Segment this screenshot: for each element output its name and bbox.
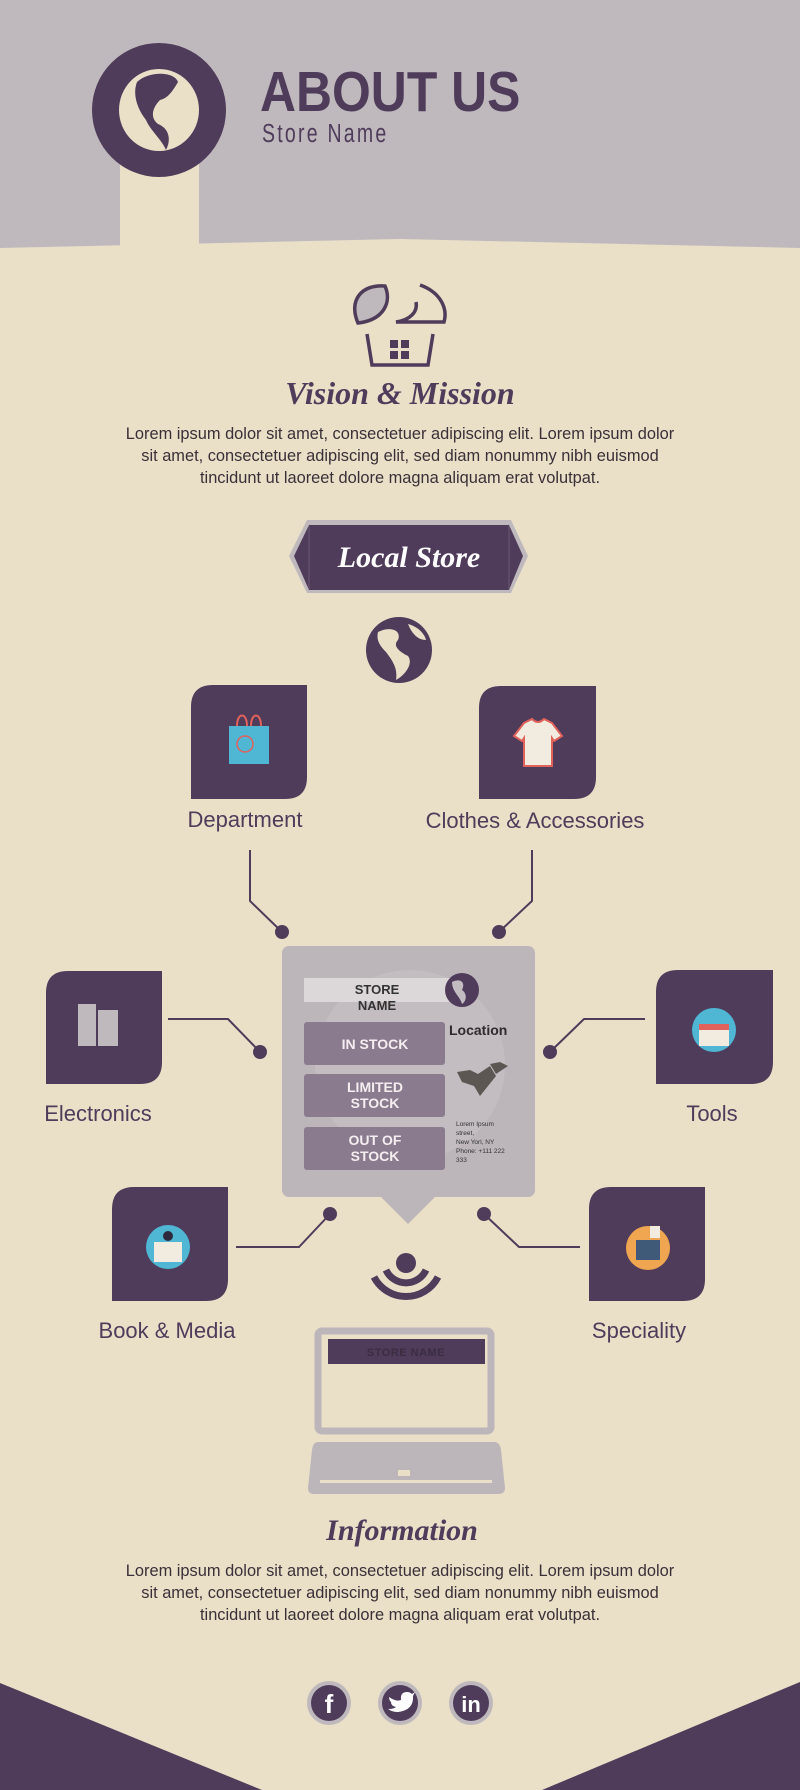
text block: vision paragraph	[126, 425, 675, 487]
icon: header globe	[92, 43, 226, 177]
heading: Information: Information	[325, 1514, 478, 1547]
text block: information paragraph	[126, 1562, 675, 1624]
title: Store Name	[262, 118, 388, 148]
panel: center store card	[282, 946, 535, 1224]
text block: information paragraph: sit amet, consectetuer adipiscing elit, sed diam nonummy nibh euismod	[141, 1584, 659, 1602]
connectors	[168, 850, 645, 1247]
panel: Book & Media: Book & Media	[99, 1318, 236, 1343]
location: Location	[449, 1022, 507, 1038]
address: street,	[456, 1130, 474, 1137]
social icons: in	[461, 1692, 481, 1717]
panel: Tools: Tools	[686, 1101, 738, 1126]
panel: Clothes & Accessories	[426, 686, 644, 833]
stock buttons: LIMITED	[347, 1079, 403, 1095]
address	[456, 1121, 505, 1164]
panel: Book & Media	[99, 1187, 236, 1343]
panel: Clothes & Accessories: Clothes & Accessories	[426, 808, 644, 833]
text block: vision paragraph: tincidunt ut laoreet dolore magna aliquam erat volutpat.	[200, 469, 600, 487]
stock buttons: STOCK	[351, 1148, 399, 1164]
stock buttons: STOCK	[351, 1095, 399, 1111]
address: 333	[456, 1157, 467, 1164]
icon: map	[457, 1062, 508, 1096]
stock buttons: IN STOCK	[342, 1036, 408, 1052]
social icons	[307, 1681, 493, 1725]
icon: laptop	[308, 1331, 505, 1494]
heading: Vision & Mission: Vision & Mission	[285, 375, 515, 411]
icon: globe	[366, 617, 432, 683]
store name bar	[304, 978, 450, 1013]
icon: house	[355, 285, 445, 365]
panel: Electronics	[44, 971, 162, 1126]
text block: information paragraph: Lorem ipsum dolor sit amet, consectetuer adipiscing elit. Lorem ipsum dolor	[126, 1562, 675, 1580]
stock buttons	[304, 1022, 445, 1170]
header band	[0, 0, 800, 250]
panel: Department: Department	[188, 807, 302, 832]
banner: Local Store	[289, 520, 528, 593]
address: New Yorl, NY	[456, 1139, 495, 1146]
banner: Local Store: Local Store	[337, 541, 480, 574]
address: Lorem Ipsum	[456, 1121, 494, 1128]
store name bar: NAME	[358, 998, 396, 1013]
address: Phone: +111 222	[456, 1148, 505, 1155]
stock buttons: OUT OF	[349, 1132, 402, 1148]
title: ABOUT US	[260, 61, 520, 124]
panel: Speciality	[589, 1187, 705, 1343]
icon: small globe	[445, 973, 479, 1007]
panel: Tools	[656, 970, 773, 1126]
panel: Department	[188, 685, 307, 832]
store name bar: STORE	[355, 982, 400, 997]
text block: vision paragraph: sit amet, consectetuer adipiscing elit, sed diam nonummy nibh euismod	[141, 447, 659, 465]
text block: information paragraph: tincidunt ut laoreet dolore magna aliquam erat volutpat.	[200, 1606, 600, 1624]
icon: laptop: STORE NAME	[367, 1347, 445, 1359]
icon: wifi	[374, 1253, 438, 1297]
text block: vision paragraph: Lorem ipsum dolor sit amet, consectetuer adipiscing elit. Lorem ipsum dolor	[126, 425, 675, 443]
panel: Speciality: Speciality	[592, 1318, 686, 1343]
footer shapes	[0, 1682, 800, 1790]
panel: Electronics: Electronics	[44, 1101, 152, 1126]
social icons: f	[325, 1689, 334, 1719]
